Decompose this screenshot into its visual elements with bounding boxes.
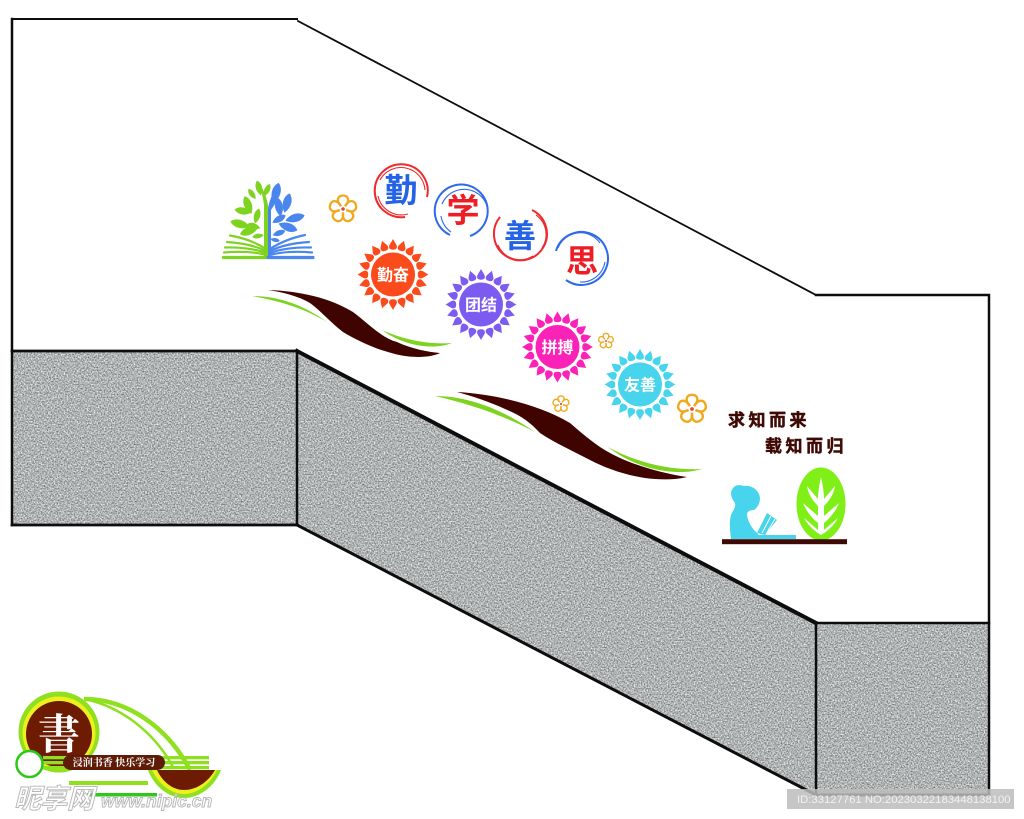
- watermark: image id bar: [787, 789, 1014, 809]
- icon: small flower near swoosh: [552, 396, 570, 412]
- girl silhouette: [730, 485, 796, 539]
- swoosh: lower: [435, 392, 702, 479]
- seal: 思: [556, 232, 608, 285]
- sun badge: 勤奋: 勤奋: [377, 266, 409, 284]
- swoosh: upper: [252, 290, 452, 357]
- book pages: [757, 513, 777, 535]
- tree blue half: [268, 182, 306, 256]
- watermark: nipic: [14, 784, 212, 814]
- icon: yellow flower top: [329, 196, 357, 223]
- sun badge: 团结: 团结: [465, 296, 497, 314]
- seal: 学: 学: [446, 192, 480, 229]
- sun badge: 团结: [446, 269, 516, 340]
- watermark: image id bar: ID:33127761 NO:20230322183448138100: [797, 794, 1011, 806]
- sun badge: 拼搏: [522, 312, 593, 382]
- pill: [63, 755, 165, 770]
- bowl: [148, 770, 221, 798]
- logo: 書 emblem: 書: [38, 712, 80, 759]
- icon: reading girl and leaf on shelf: [722, 468, 847, 544]
- logo: 書 emblem: 浸润书香 快乐学习: [73, 756, 155, 769]
- shelf: [722, 539, 847, 544]
- book right pages: [268, 235, 313, 258]
- stripes: [43, 756, 209, 785]
- arcs: [84, 699, 190, 770]
- watermark: nipic: 昵享网: [14, 784, 98, 814]
- icon: flower near 友善: [677, 395, 707, 424]
- seal: 勤: [375, 164, 428, 217]
- icon: book and tree: [224, 180, 313, 258]
- seal: 勤: 勤: [384, 172, 418, 209]
- seal: 思: 思: [566, 243, 598, 279]
- tree green half: [229, 180, 272, 256]
- seal: 善: [494, 210, 547, 260]
- leaf oval: [796, 468, 846, 540]
- slogan: 求知而来 载知而归: [728, 411, 847, 456]
- sun badge: 勤奋: [358, 239, 428, 310]
- watermark: nipic: www.nipic.cn: [101, 791, 212, 811]
- sun badge: 友善: [604, 349, 676, 420]
- sun badge: 拼搏: 拼搏: [541, 338, 574, 357]
- leaf veins: [803, 477, 839, 535]
- seal: 学: [435, 184, 488, 236]
- icon: small flower near 拼搏: [598, 333, 614, 349]
- seal: 善: 善: [504, 218, 536, 254]
- emblem ring: [18, 692, 100, 772]
- slogan: 求知而来 载知而归: 求知而来: [728, 411, 810, 430]
- book left pages: [224, 236, 268, 258]
- small circle: [16, 751, 42, 777]
- slogan: 求知而来 载知而归: 载知而归: [765, 436, 847, 456]
- sun badge: 友善: 友善: [624, 376, 656, 394]
- logo: 書 emblem: [16, 692, 221, 798]
